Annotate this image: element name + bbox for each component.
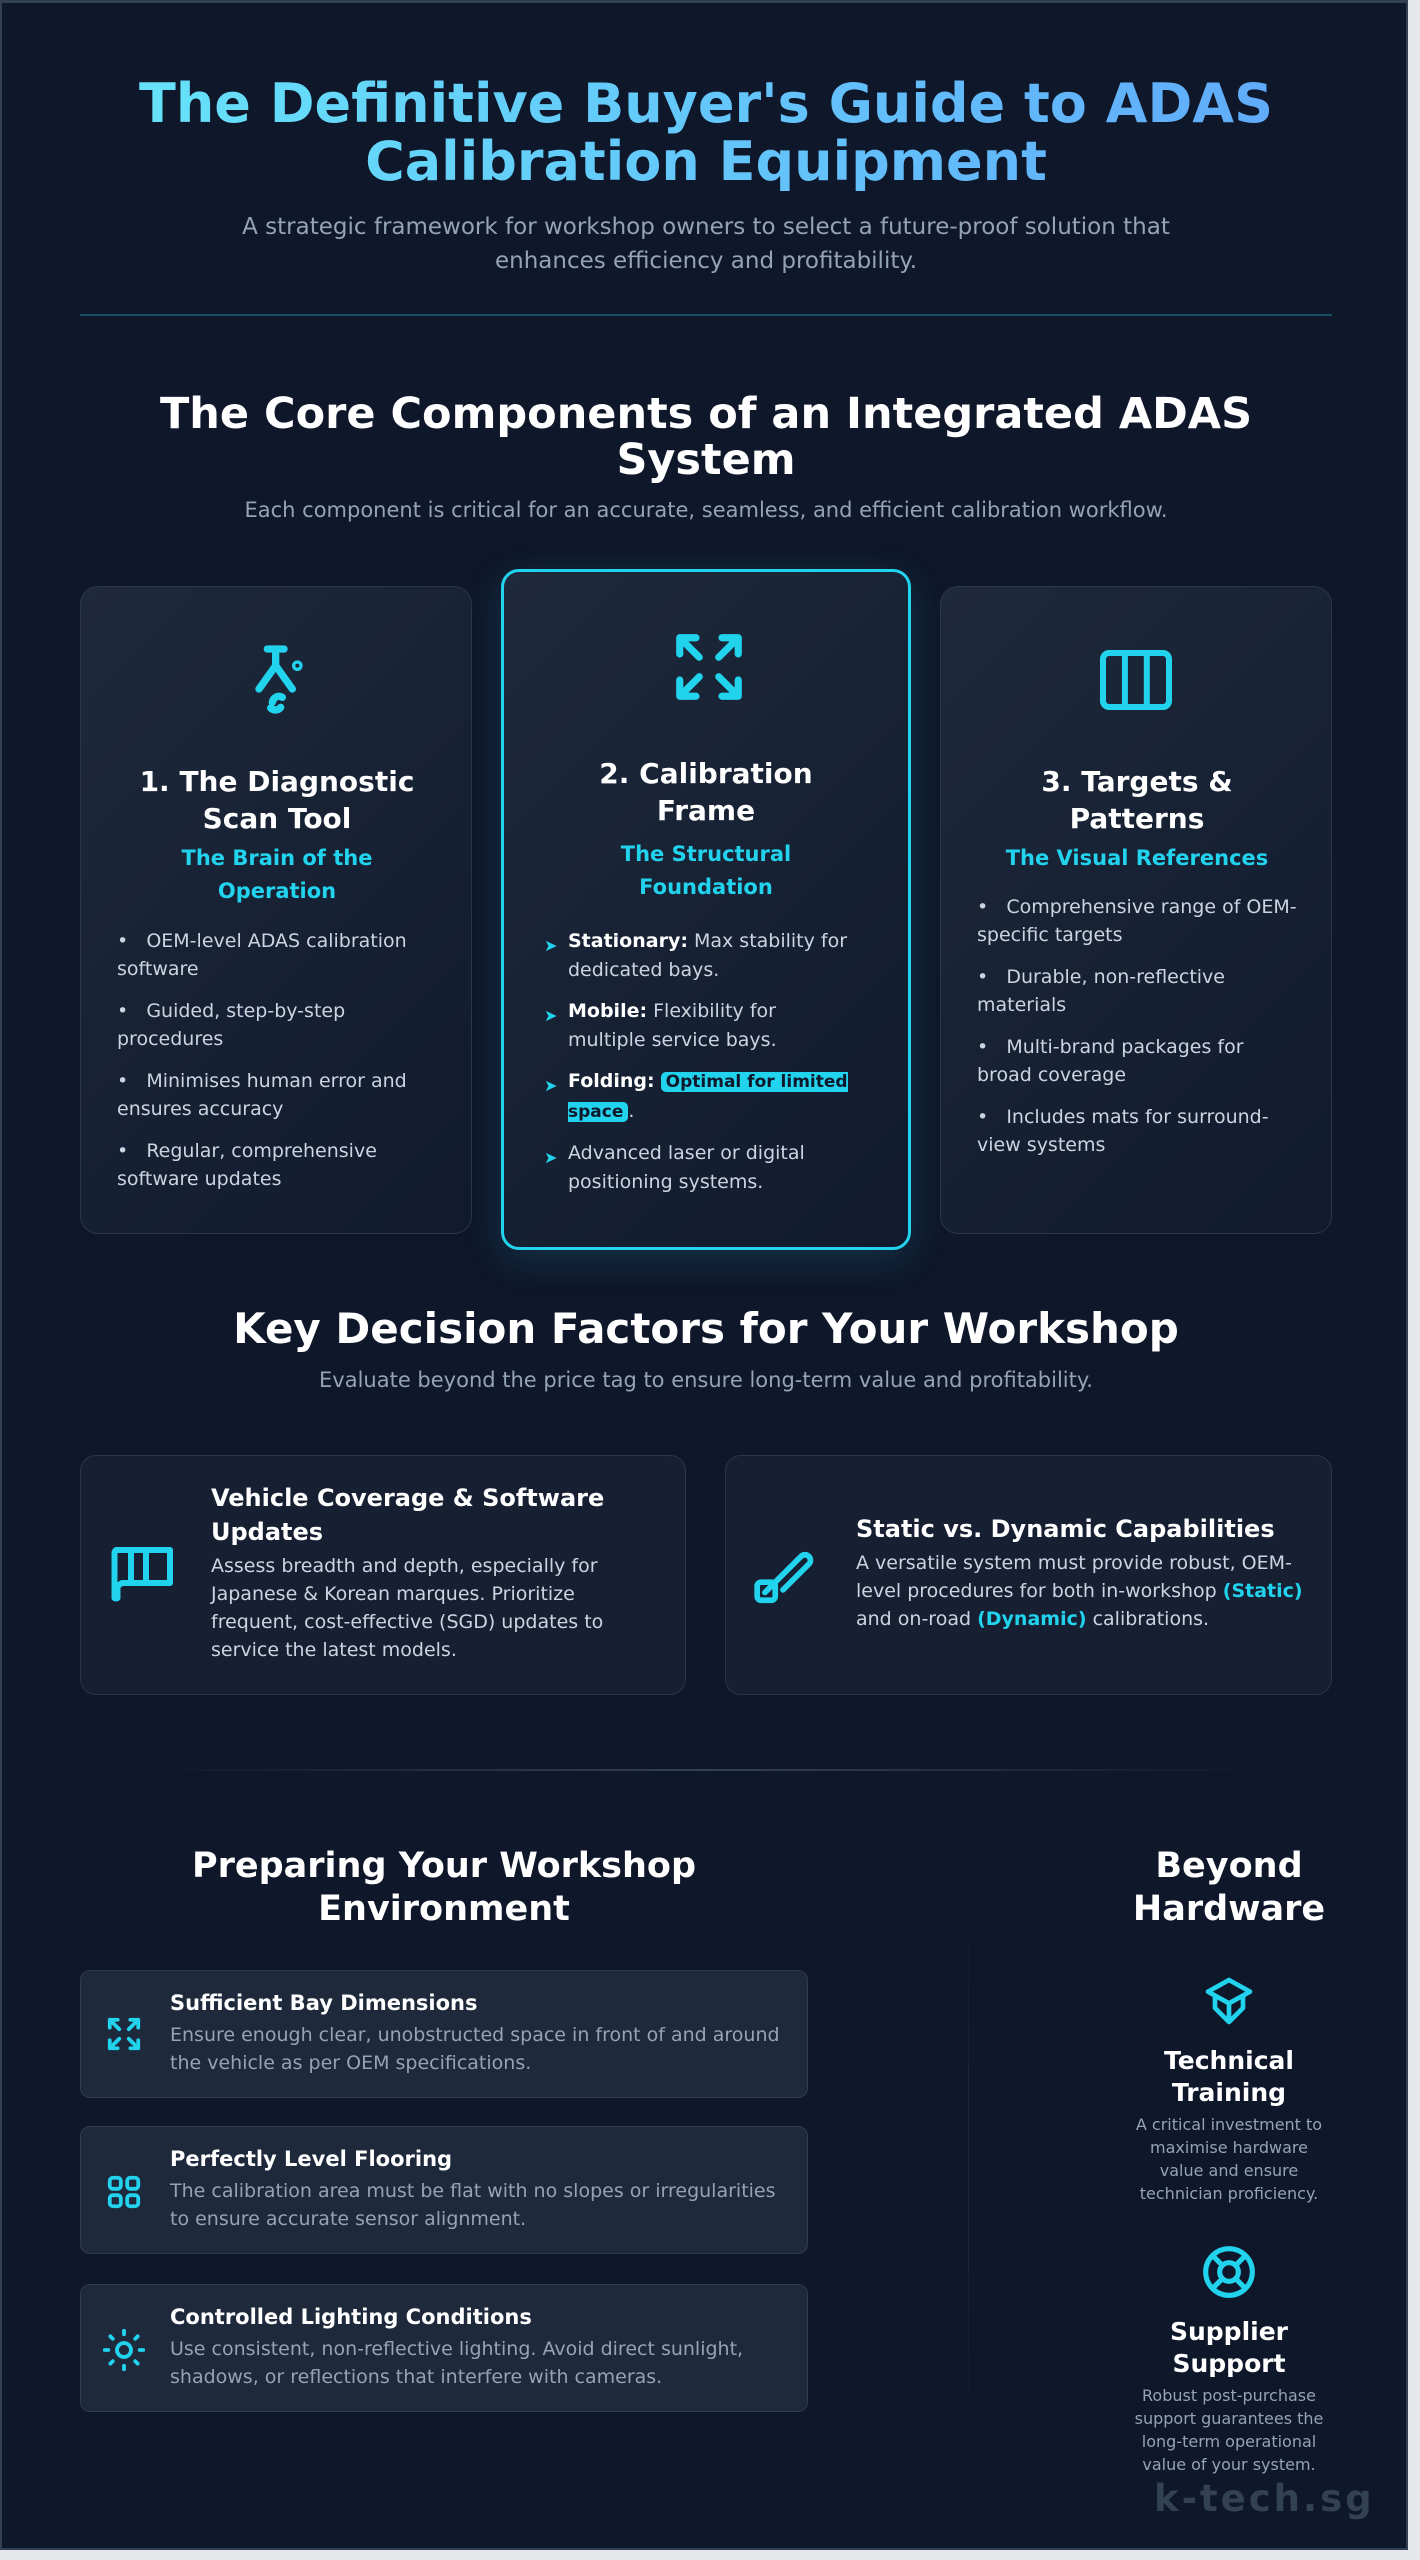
card title: 3. Targets & Patterns bbox=[1041, 765, 1233, 835]
block: supplier support bbox=[1135, 2246, 1323, 2474]
icon: expand arrows bbox=[676, 634, 742, 700]
factor title: Static vs. Dynamic Capabilities bbox=[856, 1515, 1275, 1543]
icon: pen tool bbox=[754, 1552, 814, 1604]
card title: 2. Calibration Frame bbox=[599, 757, 813, 827]
env title: Controlled Lighting Conditions bbox=[170, 2305, 532, 2329]
icon: expand bbox=[108, 2018, 140, 2050]
bullet list bbox=[117, 930, 407, 1190]
heading: beyond hardware: Beyond bbox=[1155, 1846, 1303, 1886]
heading: beyond hardware: Hardware bbox=[1133, 1889, 1325, 1929]
bullet list: Includes mats for surround-view systems bbox=[977, 1106, 1269, 1156]
arrow list: Stationary: Max stability for dedicated bays. bbox=[568, 930, 847, 981]
factor text: Assess breadth and depth, especially for Japanese & Korean marques. Prioritize frequent, cost-effective (SGD) updates to service the latest models. bbox=[211, 1555, 603, 1661]
bullet list: Durable, non-reflective materials bbox=[977, 966, 1225, 1016]
title: The Definitive Buyer's Guide to ADAS bbox=[139, 72, 1273, 135]
title bbox=[2, 75, 1410, 191]
heading: core components: The Core Components of an Integrated ADAS System bbox=[160, 389, 1252, 485]
panel: targets & patterns bbox=[940, 586, 1332, 1234]
env title: Perfectly Level Flooring bbox=[170, 2147, 452, 2171]
bullet list: Minimises human error and ensures accuracy bbox=[117, 1070, 407, 1120]
title: Calibration Equipment bbox=[365, 130, 1047, 193]
bullet list: Regular, comprehensive software updates bbox=[117, 1140, 377, 1190]
section subtitle: core components: Each component is critical for an accurate, seamless, and efficient calibration workflow. bbox=[244, 498, 1168, 522]
arrow list bbox=[546, 930, 848, 1193]
heading: decision factors: Key Decision Factors for Your Workshop bbox=[233, 1304, 1179, 1353]
block title: Technical Training bbox=[1164, 2046, 1294, 2107]
panel: diagnostic scan tool bbox=[80, 586, 472, 1234]
panel: level flooring bbox=[80, 2126, 808, 2254]
block: technical training bbox=[1136, 1978, 1322, 2203]
heading: preparing workshop: Environment bbox=[318, 1889, 570, 1929]
icon: flask bbox=[255, 645, 303, 714]
icon: grid bbox=[108, 2176, 140, 2208]
heading: preparing workshop: Preparing Your Workshop bbox=[192, 1846, 696, 1886]
icon: life buoy bbox=[1203, 2246, 1255, 2298]
env text: Use consistent, non-reflective lighting. Avoid direct sunlight, shadows, or reflections that interfere with cameras. bbox=[170, 2338, 743, 2388]
factor text: A versatile system must provide robust, OEM-level procedures for both in-workshop (Static) and on-road (Dynamic) calibrations. bbox=[856, 1552, 1303, 1630]
bullet list: Guided, step-by-step procedures bbox=[117, 1000, 345, 1050]
card subtitle: The Brain of the Operation bbox=[182, 846, 372, 903]
block text: A critical investment to maximise hardware value and ensure technician proficiency. bbox=[1136, 2115, 1322, 2203]
panel: vehicle coverage bbox=[80, 1455, 686, 1695]
icon: sun bbox=[103, 2329, 145, 2371]
env title: Sufficient Bay Dimensions bbox=[170, 1991, 478, 2015]
section subtitle: decision factors: Evaluate beyond the price tag to ensure long-term value and profitability. bbox=[319, 1368, 1093, 1392]
card subtitle: The Visual References bbox=[1006, 846, 1268, 870]
arrow list: Advanced laser or digital positioning systems. bbox=[568, 1142, 805, 1193]
panel: lighting bbox=[80, 2284, 808, 2412]
env text: Ensure enough clear, unobstructed space in front of and around the vehicle as per OEM specifications. bbox=[170, 2024, 780, 2074]
block title: Supplier Support bbox=[1170, 2317, 1288, 2378]
card subtitle: The Structural Foundation bbox=[621, 842, 791, 899]
icon: columns bbox=[1100, 650, 1172, 710]
heading: beyond hardware bbox=[1133, 1846, 1325, 1929]
heading: preparing workshop bbox=[192, 1846, 696, 1929]
subtitle: A strategic framework for workshop owners to select a future-proof solution that enhances efficiency and profitability. bbox=[242, 214, 1170, 274]
panel: bay dimensions bbox=[80, 1970, 808, 2098]
watermark: k-tech.sg bbox=[1154, 2477, 1375, 2520]
factor title: Vehicle Coverage & Software Updates bbox=[211, 1484, 604, 1546]
card title: 1. The Diagnostic Scan Tool bbox=[140, 765, 414, 835]
arrow list: Mobile: Flexibility for multiple service bays. bbox=[568, 1000, 777, 1051]
block text: Robust post-purchase support guarantees the long-term operational value of your system. bbox=[1135, 2386, 1323, 2474]
env text: The calibration area must be flat with no slopes or irregularities to ensure accurate sensor alignment. bbox=[170, 2180, 776, 2230]
arrow list: Folding: Optimal for limited space . bbox=[568, 1070, 848, 1122]
bullet list: OEM-level ADAS calibration software bbox=[117, 930, 407, 980]
panel: static vs dynamic bbox=[725, 1455, 1332, 1695]
icon: graduation cap bbox=[1206, 1978, 1252, 2024]
panel: calibration frame bbox=[501, 569, 911, 1250]
bullet list: Comprehensive range of OEM-specific targets bbox=[977, 896, 1297, 946]
icon: message square bbox=[112, 1547, 173, 1602]
bullet list bbox=[977, 896, 1297, 1156]
bullet list: Multi-brand packages for broad coverage bbox=[977, 1036, 1244, 1086]
